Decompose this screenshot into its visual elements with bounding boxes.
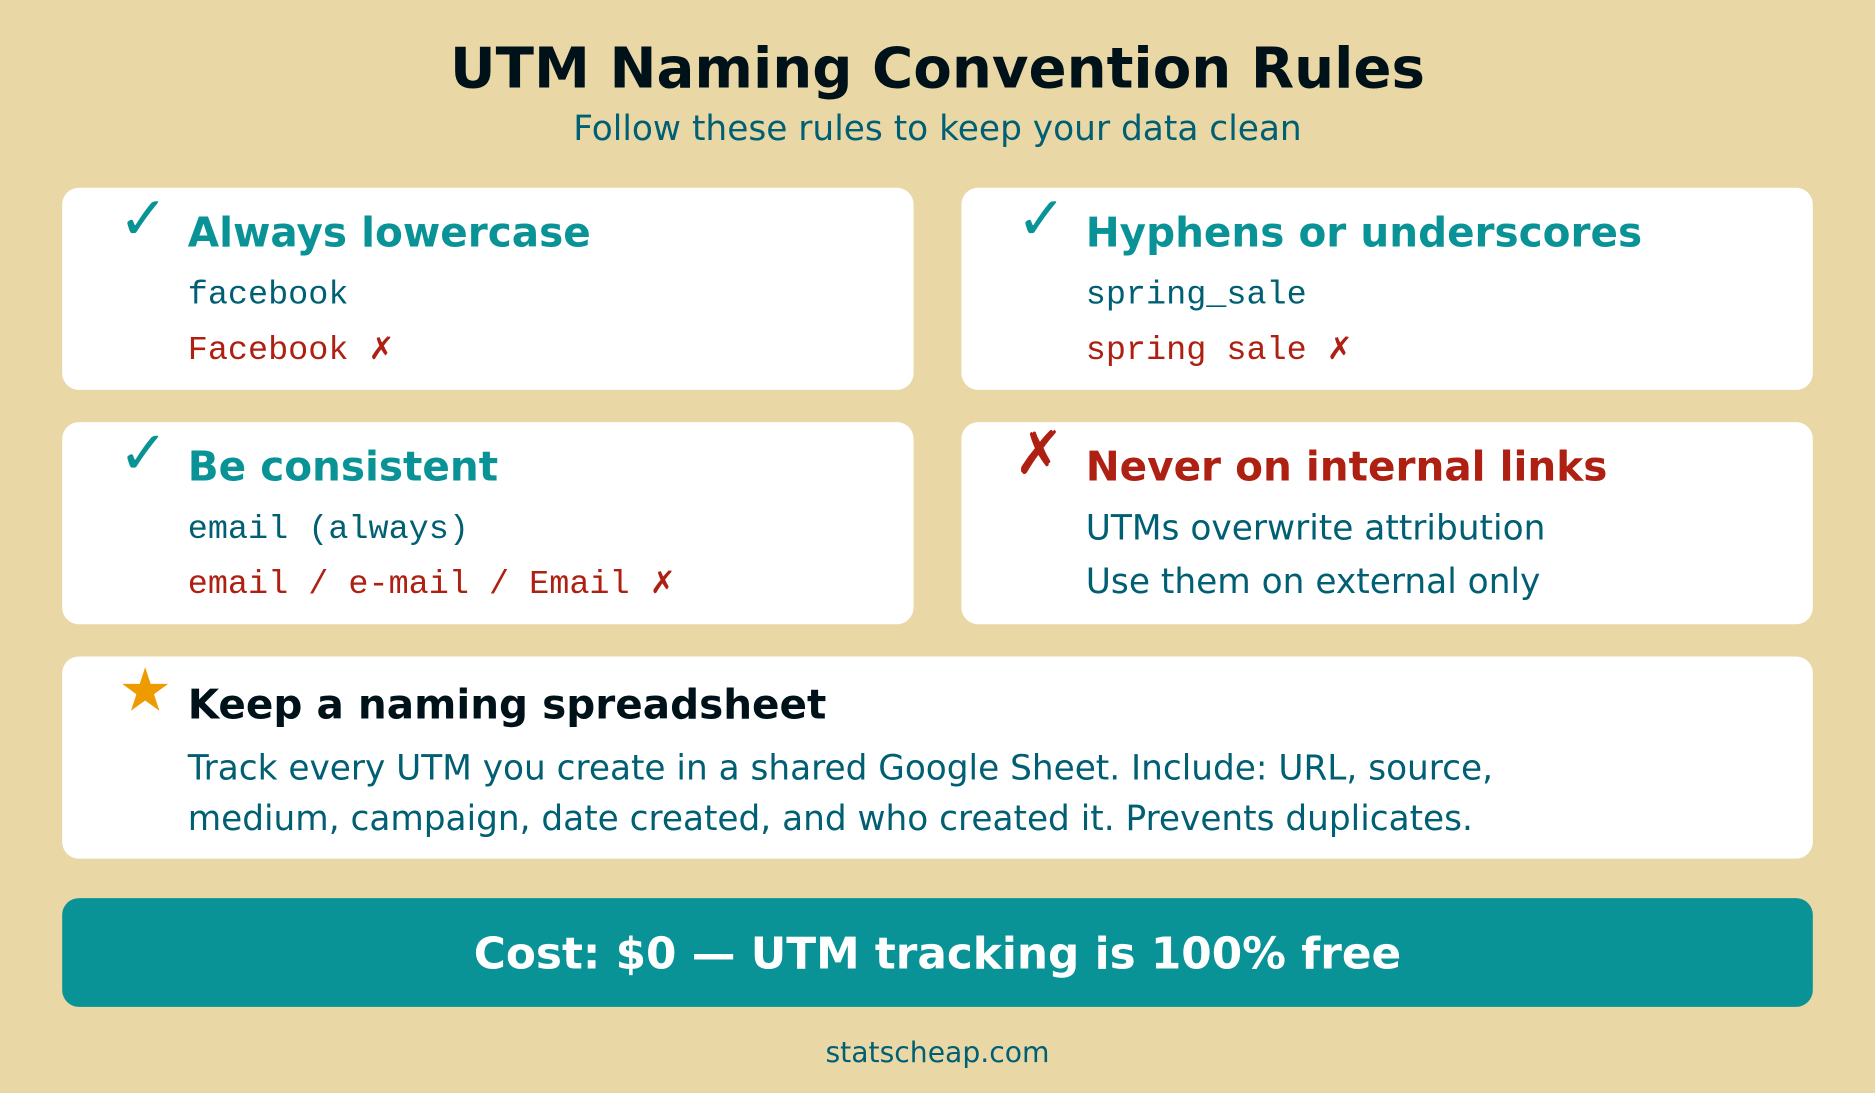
panel: spreadsheet	[62, 656, 1813, 859]
panel: hyphens	[961, 185, 1813, 390]
panel: consistent: email / e-mail / Email ✗	[188, 565, 676, 604]
icon: check: ✓	[118, 420, 168, 489]
panel: hyphens: Hyphens or underscores	[1086, 208, 1642, 256]
panel: internal links: UTMs overwrite attribution	[1086, 508, 1545, 548]
panel: spreadsheet: medium, campaign, date created, and who created it. Prevents duplicates.	[188, 799, 1473, 839]
title: UTM Naming Convention Rules	[450, 36, 1425, 101]
icon: cross: ✗	[1014, 420, 1064, 489]
panel: consistent: email (always)	[188, 511, 469, 549]
panel: hyphens: spring_sale	[1086, 277, 1307, 315]
panel: spreadsheet: Keep a naming spreadsheet	[188, 681, 826, 729]
panel: always lowercase: Always lowercase	[188, 208, 591, 256]
banner: cost: Cost: $0 — UTM tracking is 100% free	[474, 929, 1401, 980]
panel: internal links: Never on internal links	[1086, 443, 1607, 491]
panel: consistent: Be consistent	[188, 443, 498, 491]
panel: consistent	[62, 420, 914, 624]
panel: internal links: Use them on external only	[1086, 562, 1540, 602]
panel: always lowercase	[62, 185, 914, 390]
icon: check: ✓	[1016, 185, 1067, 254]
subtitle: Follow these rules to keep your data clean	[573, 109, 1302, 149]
panel: always lowercase: facebook	[188, 277, 348, 315]
panel: always lowercase: Facebook ✗	[188, 331, 395, 370]
panel: hyphens: spring sale ✗	[1086, 331, 1353, 370]
footer: statscheap.com	[825, 1036, 1050, 1069]
panel: internal links	[961, 420, 1813, 624]
banner: cost	[62, 898, 1813, 1007]
panel: spreadsheet: Track every UTM you create in a shared Google Sheet. Include: URL, source,	[187, 749, 1493, 789]
icon: check: ✓	[118, 185, 168, 254]
icon: star: ★	[118, 656, 172, 725]
